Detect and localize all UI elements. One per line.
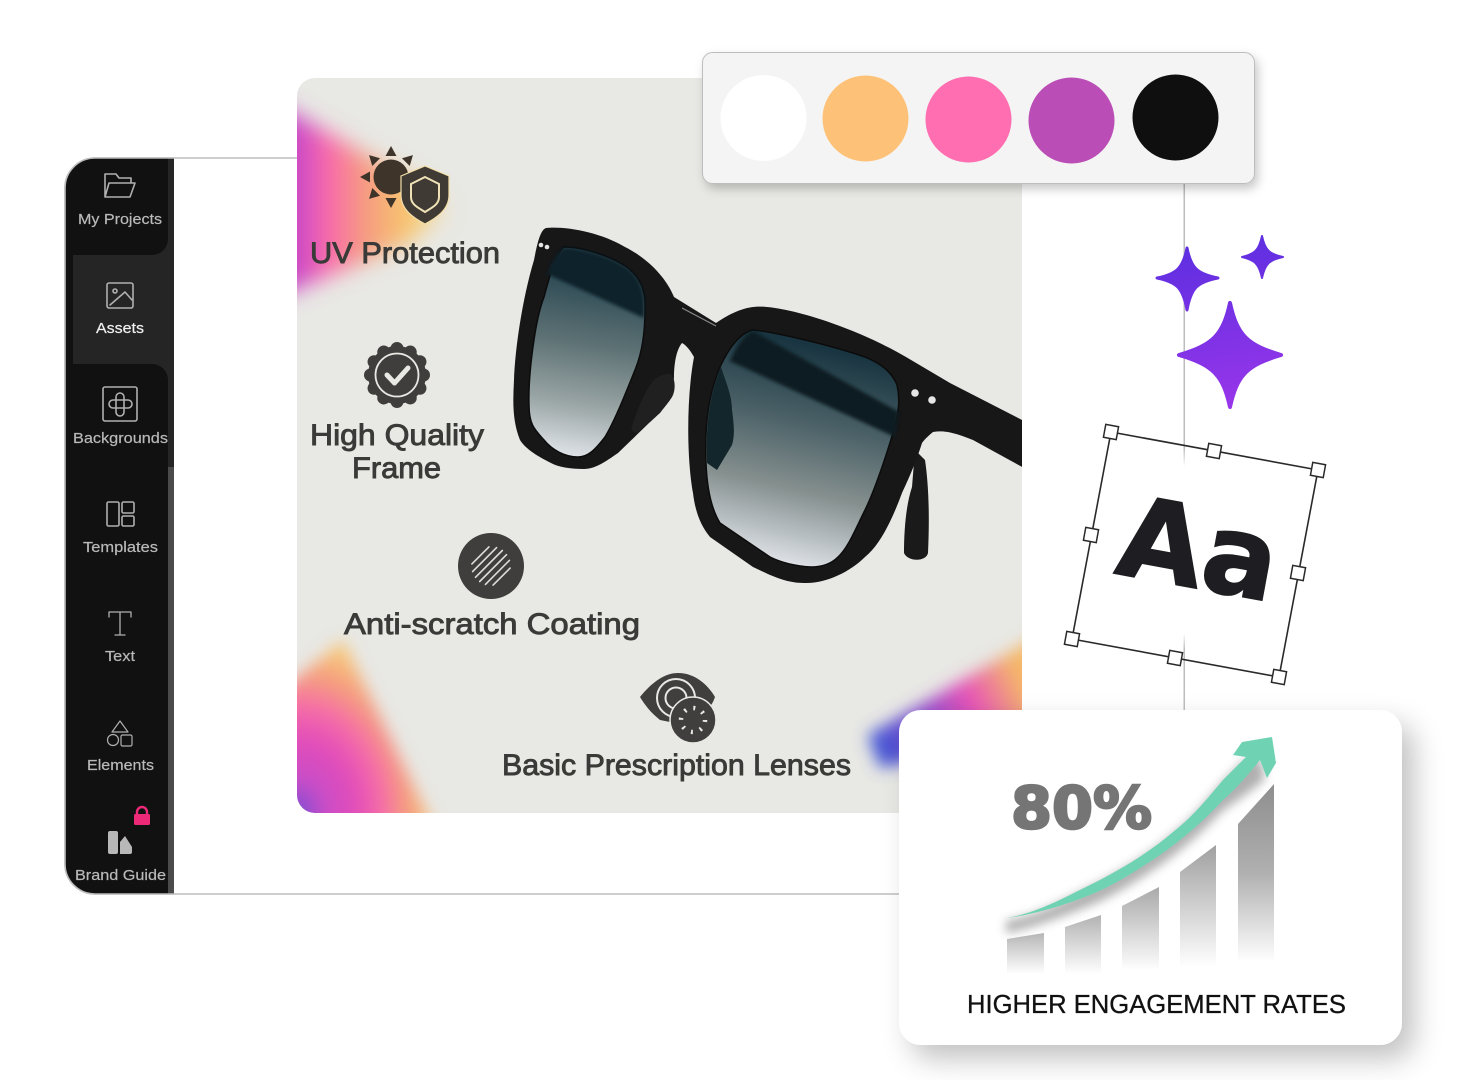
temple stem (904, 450, 929, 560)
feature: UV Protection (310, 146, 500, 270)
panel: product design card (270, 78, 1040, 840)
nav item: Templates (83, 502, 158, 556)
text selection box (1064, 424, 1326, 685)
feature: Basic Prescription Lenses (502, 673, 851, 782)
panel: sidebar navigation (60, 150, 174, 900)
bar chart (1007, 784, 1274, 974)
swatch: purple (1028, 78, 1114, 164)
nav item: Backgrounds: Backgrounds (73, 430, 168, 447)
swatch: white (720, 75, 806, 161)
nav item: Elements (87, 721, 154, 774)
nav item: My Projects (78, 174, 162, 228)
bridge highlight (682, 308, 716, 326)
panel: colour palette (702, 52, 1254, 184)
nav item: Brand Guide: Brand Guide (75, 867, 166, 884)
feature: High Quality Frame: Frame (352, 452, 441, 485)
feature: Basic Prescription Lenses: Basic Prescription Lenses (502, 749, 851, 782)
nav item: Elements: Elements (87, 757, 154, 774)
icon: scratch lines disc (458, 533, 524, 599)
sunglasses frame (513, 228, 1024, 583)
nav item: Brand Guide (75, 831, 166, 884)
swatch: orange (822, 76, 908, 162)
editor window frame (65, 158, 1184, 894)
nav item: My Projects: My Projects (78, 211, 162, 228)
swatch: black (1132, 74, 1218, 160)
feature: UV Protection: UV Protection (310, 237, 500, 270)
left lens (529, 247, 645, 457)
arrow shadow (1006, 758, 1265, 933)
nose pad (631, 374, 675, 433)
product photo: sunglasses (513, 228, 1024, 583)
feature: High Quality Frame: High Quality (310, 419, 484, 452)
icon: purple sparkles (1157, 236, 1283, 407)
nav item: Backgrounds (73, 387, 168, 447)
growth arrow (1007, 737, 1276, 918)
rivets (539, 243, 936, 404)
icon: pink lock (134, 807, 150, 825)
nav item: Text (105, 612, 136, 665)
feature: Anti-scratch Coating (344, 533, 640, 641)
feature: High Quality Frame (310, 342, 484, 485)
nav item: Assets (96, 283, 144, 337)
icon: sun and shield (360, 146, 449, 224)
stat: 80%: 80% (1011, 774, 1152, 842)
caption: HIGHER ENGAGEMENT RATES (967, 989, 1346, 1019)
vertical guide line (1184, 183, 1185, 713)
right lens (706, 330, 899, 567)
feature: Anti-scratch Coating: Anti-scratch Coating (344, 608, 640, 641)
nav item: Assets: Assets (96, 320, 144, 337)
icon: eye with lens (640, 673, 716, 743)
resize handles (1064, 424, 1326, 685)
swatch: pink (926, 76, 1012, 162)
panel: engagement stat card (899, 710, 1402, 1045)
icon: quality badge (364, 342, 430, 408)
nav item: Text: Text (105, 648, 136, 665)
gradient accents (270, 100, 1040, 840)
sample text Aa: Aa (1108, 472, 1289, 628)
nav item: Templates: Templates (83, 539, 158, 556)
